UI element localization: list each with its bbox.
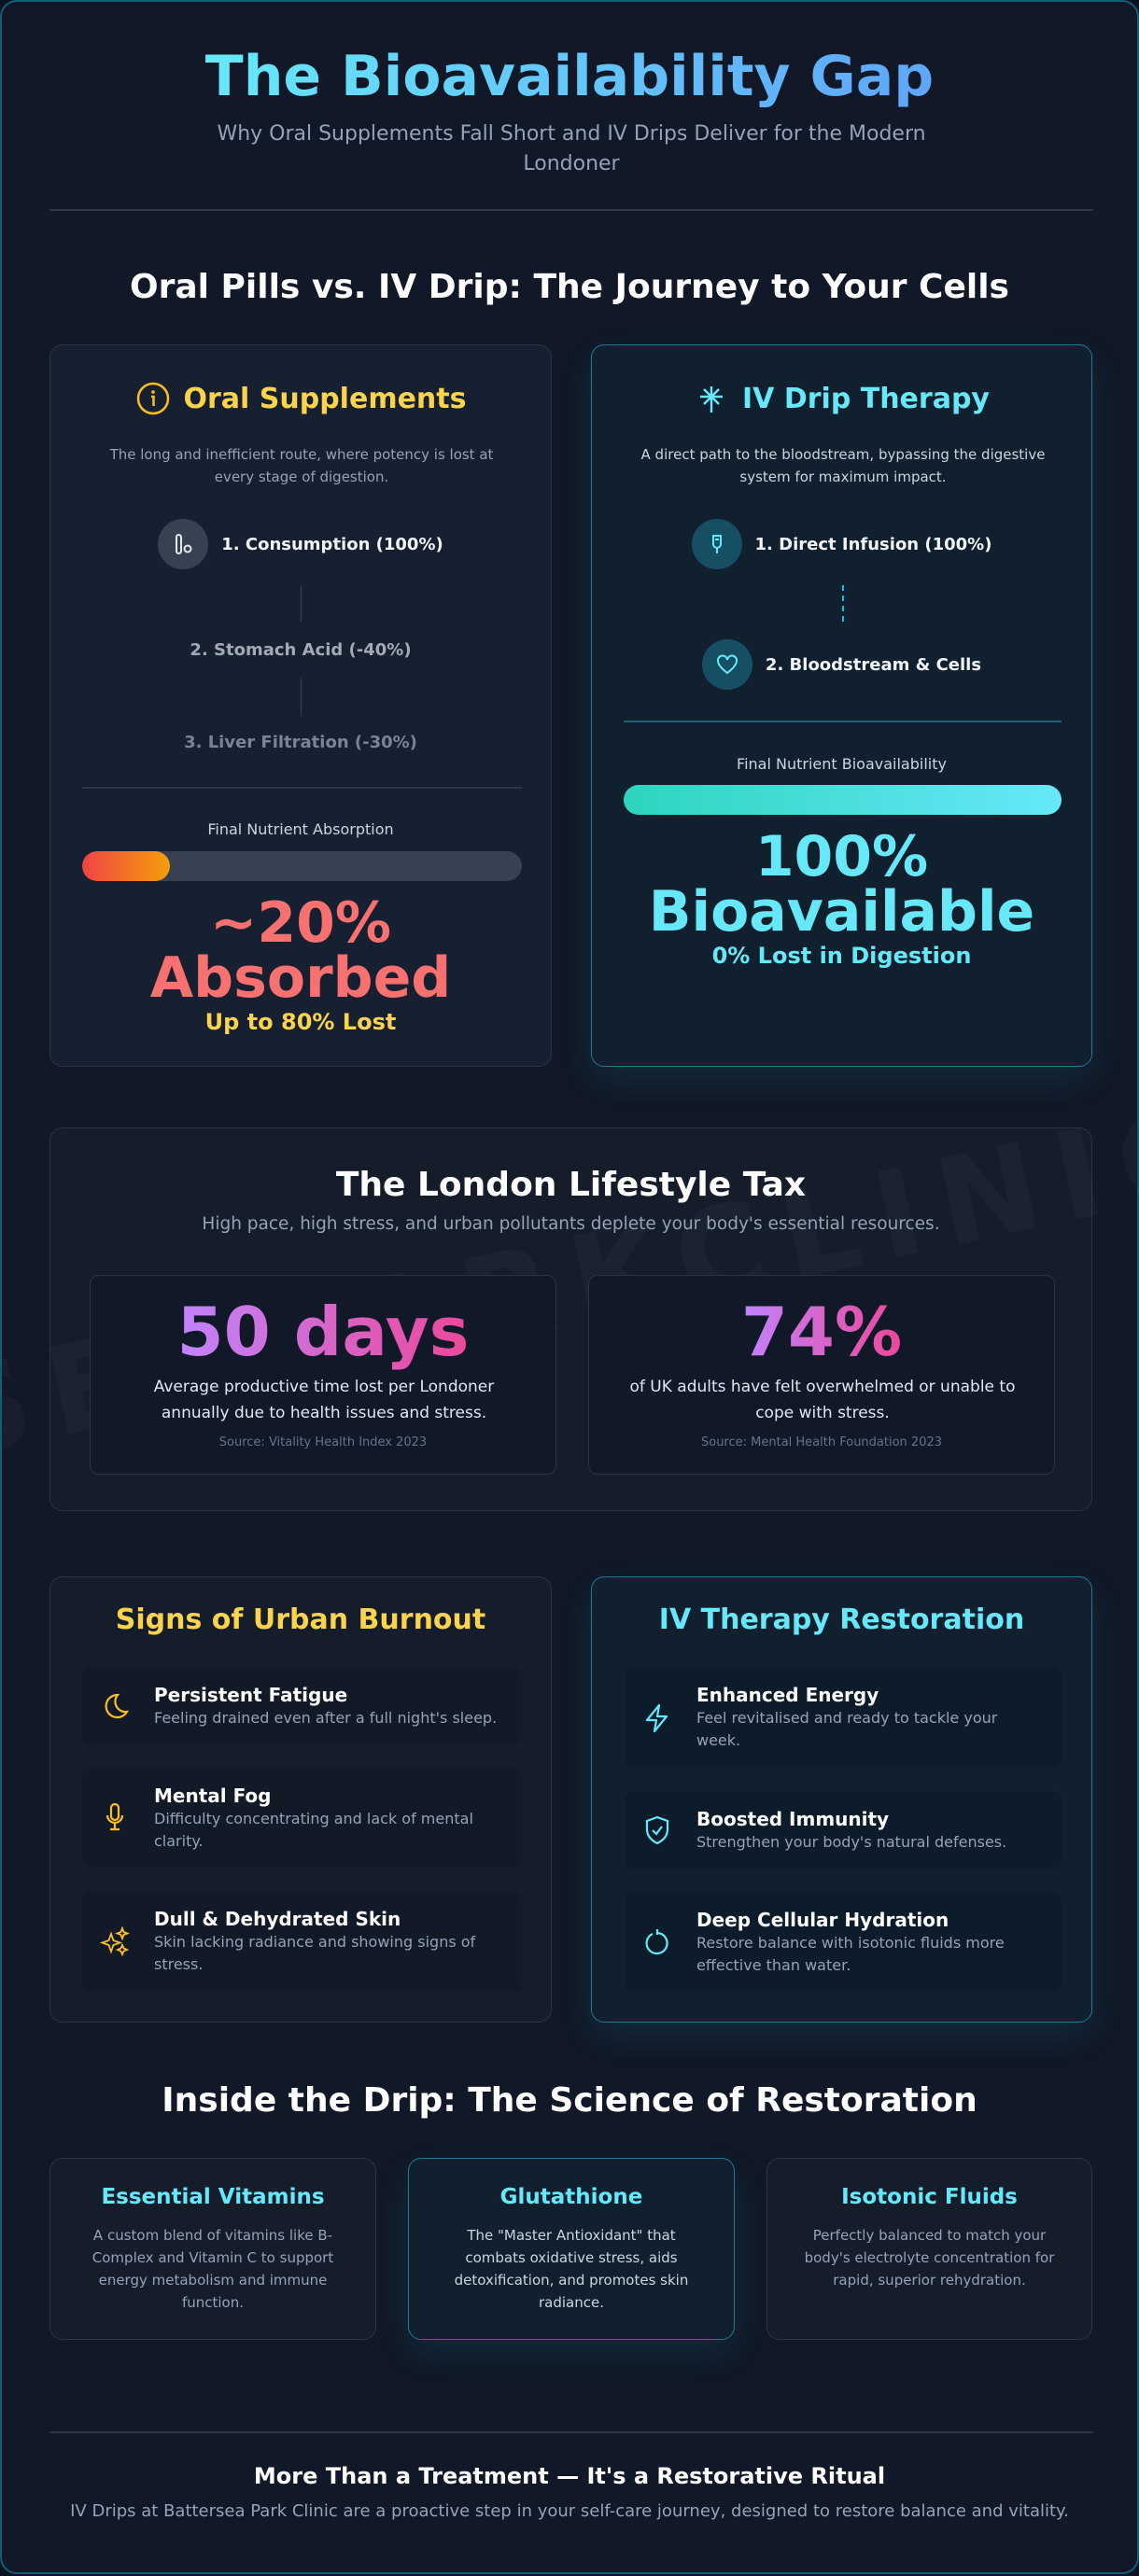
item: hydration: Deep Cellular Hydration bbox=[696, 1909, 949, 1931]
item: mental fog: Difficulty concentrating and lack of mental clarity. bbox=[154, 1810, 473, 1850]
card: essential vitamins: A custom blend of vitamins like B-Complex and Vitamin C to support energy metabolism and immune function. bbox=[92, 2227, 333, 2311]
stat: 74% bbox=[588, 1275, 1055, 1475]
bioavailability bar bbox=[624, 755, 1062, 815]
item: energy: Feel revitalised and ready to tackle your week. bbox=[696, 1709, 997, 1749]
item: fatigue bbox=[82, 1667, 522, 1745]
step 3: 3. Liver Filtration (-30%) bbox=[184, 733, 417, 752]
stat: 74%: 74% bbox=[741, 1293, 902, 1371]
note: up to 80% lost: Up to 80% Lost bbox=[205, 1009, 396, 1035]
card: glutathione: Glutathione bbox=[500, 2185, 642, 2209]
note: 0% lost: 0% Lost in Digestion bbox=[712, 943, 971, 969]
stat: 50 days bbox=[90, 1275, 556, 1475]
absorption bar: Final Nutrient Absorption bbox=[207, 820, 394, 838]
section heading: inside the drip: Inside the Drip: The Science of Restoration bbox=[162, 2081, 977, 2120]
item: skin bbox=[82, 1891, 522, 1991]
stat: 20% absorbed: Absorbed bbox=[150, 945, 451, 1011]
step 1: 1. Consumption (100%) bbox=[221, 534, 443, 554]
card: essential vitamins bbox=[49, 2158, 376, 2340]
stat: 100% bioavailable: 100% bbox=[755, 824, 928, 889]
step 2: 2. Stomach Acid (-40%) bbox=[190, 640, 412, 660]
card: isotonic fluids: Isotonic Fluids bbox=[841, 2185, 1018, 2209]
footer text: IV Drips at Battersea Park Clinic are a proactive step in your self-care journey, designed to restore balance and vitality. bbox=[70, 2501, 1069, 2521]
item: energy: Enhanced Energy bbox=[696, 1684, 879, 1706]
card: essential vitamins: Essential Vitamins bbox=[101, 2185, 325, 2209]
stat: 74%: Source: Mental Health Foundation 2023 bbox=[701, 1435, 942, 1449]
footer heading: More Than a Treatment — It's a Restorative Ritual bbox=[254, 2463, 885, 2489]
panel: oral supplements bbox=[49, 344, 552, 1067]
step 1 bbox=[692, 519, 991, 569]
step 1 bbox=[158, 519, 443, 569]
step 1: 1. Direct Infusion (100%) bbox=[755, 534, 991, 554]
description: The long and inefficient route, where potency is lost at every stage of digestion. bbox=[110, 446, 493, 485]
card: glutathione: The "Master Antioxidant" that combats oxidative stress, aids detoxification, and promotes skin radiance. bbox=[455, 2227, 688, 2311]
heading: The London Lifestyle Tax bbox=[336, 1166, 806, 1204]
item: energy bbox=[625, 1667, 1062, 1769]
stat: 20% absorbed: ~20% bbox=[210, 890, 391, 956]
absorption bar bbox=[82, 820, 522, 881]
item: skin: Dull & Dehydrated Skin bbox=[154, 1908, 401, 1930]
stat: 100% bioavailable bbox=[649, 824, 1034, 945]
heading: oral supplements: Oral Supplements bbox=[183, 383, 466, 414]
title: The Bioavailability Gap bbox=[205, 44, 934, 109]
item: fatigue: Persistent Fatigue bbox=[154, 1684, 347, 1706]
stat: 74%: of UK adults have felt overwhelmed or unable to cope with stress. bbox=[630, 1378, 1015, 1422]
stat: 100% bioavailable: Bioavailable bbox=[649, 879, 1034, 945]
item: mental fog: Mental Fog bbox=[154, 1785, 271, 1807]
panel: london lifestyle tax bbox=[49, 1127, 1092, 1511]
step 2: 2. Bloodstream & Cells bbox=[766, 655, 981, 674]
panel: signs of urban burnout bbox=[49, 1576, 552, 2023]
subheading: High pace, high stress, and urban pollutants deplete your body's essential resources. bbox=[202, 1214, 940, 1234]
card: glutathione bbox=[408, 2158, 735, 2340]
subtitle: Why Oral Supplements Fall Short and IV Drips Deliver for the Modern Londoner bbox=[217, 122, 926, 175]
item: mental fog bbox=[82, 1768, 522, 1867]
item: immunity: Boosted Immunity bbox=[696, 1808, 889, 1830]
item: hydration bbox=[625, 1892, 1062, 1993]
stat: 50 days: Source: Vitality Health Index 2023 bbox=[219, 1435, 427, 1449]
heading: iv drip: IV Drip Therapy bbox=[742, 383, 990, 414]
panel: iv drip therapy bbox=[591, 344, 1092, 1067]
heading: Signs of Urban Burnout bbox=[116, 1603, 485, 1636]
item: immunity bbox=[625, 1791, 1062, 1869]
item: immunity: Strengthen your body's natural defenses. bbox=[696, 1833, 1006, 1851]
section heading: journey: Oral Pills vs. IV Drip: The Journey to Your Cells bbox=[130, 268, 1009, 306]
item: fatigue: Feeling drained even after a full night's sleep. bbox=[154, 1709, 497, 1727]
step 2 bbox=[702, 639, 981, 690]
card: isotonic fluids: Perfectly balanced to match your body's electrolyte concentration for rapid, superior rehydration. bbox=[805, 2227, 1054, 2289]
stat: 50 days: 50 days bbox=[177, 1293, 469, 1371]
stat: 50 days: Average productive time lost per Londoner annually due to health issues and stress. bbox=[154, 1378, 494, 1422]
card: isotonic fluids bbox=[766, 2158, 1092, 2340]
item: skin: Skin lacking radiance and showing signs of stress. bbox=[154, 1933, 475, 1973]
stat: 20% absorbed bbox=[150, 890, 451, 1011]
heading: IV Therapy Restoration bbox=[659, 1603, 1024, 1636]
item: hydration: Restore balance with isotonic fluids more effective than water. bbox=[696, 1934, 1005, 1974]
panel: iv therapy restoration bbox=[591, 1576, 1092, 2023]
description: A direct path to the bloodstream, bypassing the digestive system for maximum impact. bbox=[641, 446, 1045, 485]
bioavailability bar: Final Nutrient Bioavailability bbox=[737, 755, 947, 773]
